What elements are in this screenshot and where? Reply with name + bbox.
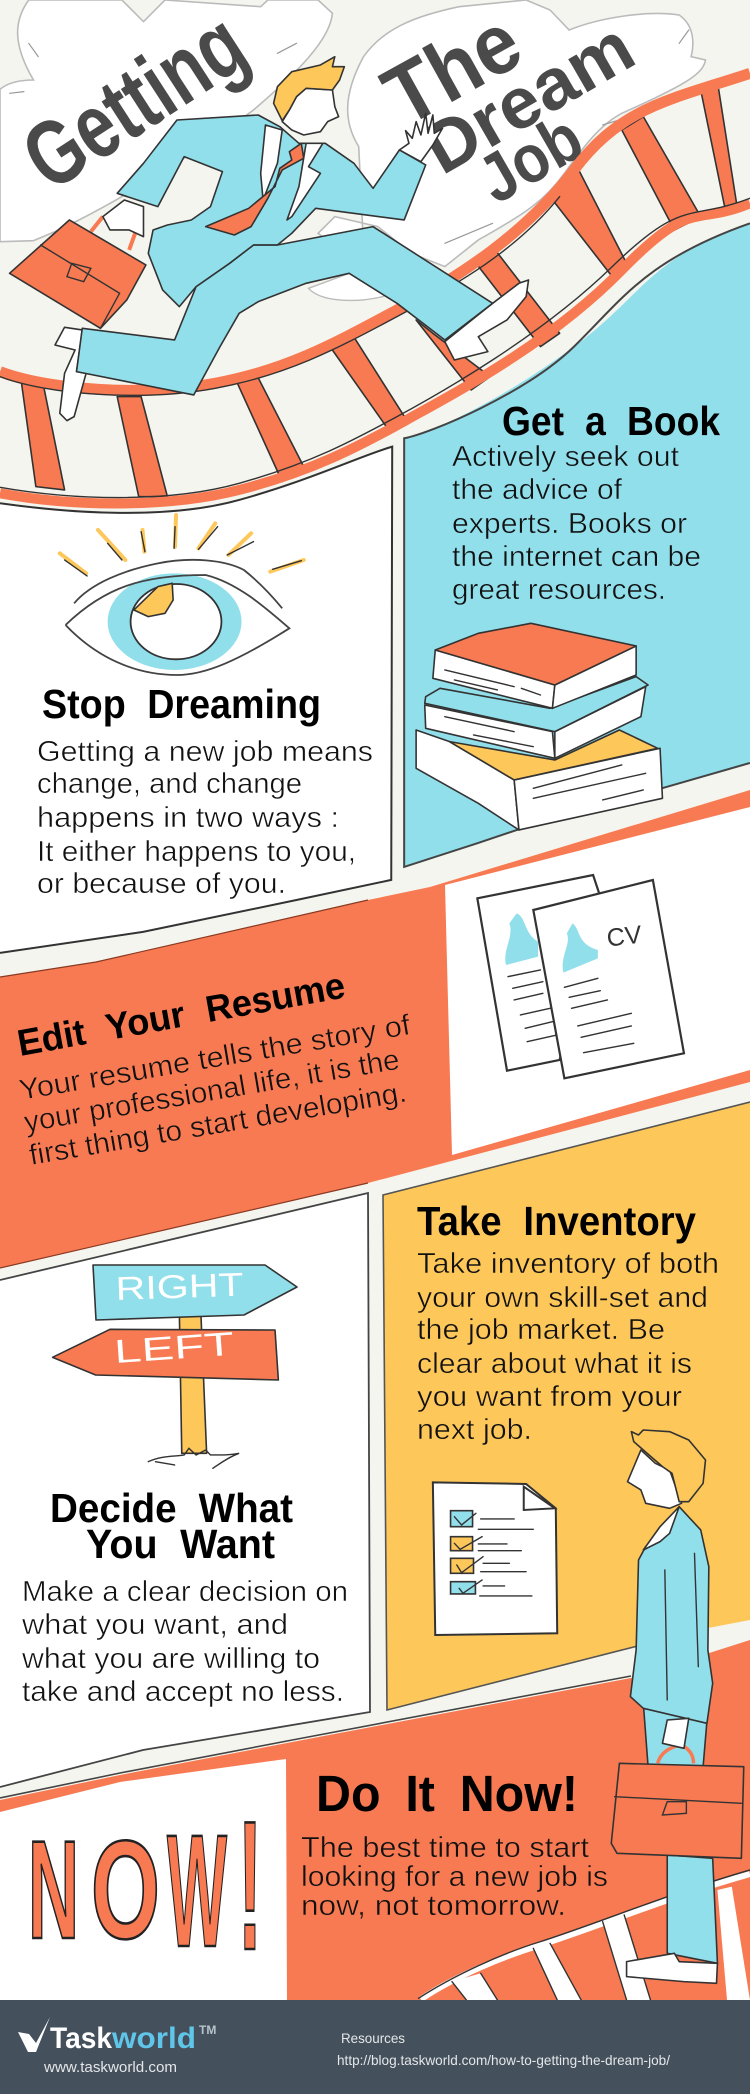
title (5, 0, 647, 218)
text: stop dreaming body: Getting a new job means (37, 736, 373, 768)
text: take inventory body: the job market. Be (417, 1314, 665, 1346)
briefcase (611, 1763, 744, 1858)
cv label: CV (606, 921, 643, 953)
lower legs (667, 1855, 717, 1963)
face (282, 88, 339, 135)
icon: eye (60, 515, 304, 675)
logo: taskworld: Task (50, 2022, 112, 2055)
trousers (77, 227, 493, 395)
hand (662, 1718, 689, 1748)
text: do it now body: now, not tomorrow. (301, 1890, 566, 1922)
text: edit your resume body: first thing to start developing. (27, 1077, 409, 1172)
title: Dream (410, 7, 647, 190)
website: www.taskworld.com (43, 2059, 177, 2076)
text: stop dreaming body: change, and change (37, 768, 302, 800)
shoes (627, 1953, 717, 1983)
panel: take inventory background (383, 1102, 750, 1710)
text: do it now body: looking for a new job is (301, 1861, 608, 1893)
back hand (103, 200, 143, 237)
logo: taskworld (18, 2017, 216, 2055)
text: do it now body (301, 1832, 608, 1922)
infographic canvas: ! (238, 1782, 262, 1988)
heading: edit your resume: Edit Your Resume (14, 965, 348, 1064)
resources label: Resources (341, 2030, 405, 2046)
logo: taskworld: world (111, 2022, 196, 2055)
text: take inventory body (417, 1248, 719, 1446)
text: get a book body: great resources. (452, 574, 666, 606)
text: get a book body: the advice of (452, 474, 623, 506)
text: decide what you want body: what you are willing to (21, 1643, 320, 1675)
hair (274, 57, 344, 121)
eye rays (60, 515, 304, 576)
right sign (93, 1265, 297, 1320)
icon: now lettering: N (28, 1811, 79, 1968)
text: take inventory body: Take inventory of both (417, 1248, 719, 1280)
text: get a book body (452, 441, 701, 606)
upper legs (643, 1703, 708, 1767)
panel: edit your resume background (0, 790, 750, 1268)
text: decide what you want body: Make a clear decision on (22, 1576, 348, 1608)
icon: now lettering: O (91, 1811, 160, 1968)
text: stop dreaming body: or because of you. (37, 868, 286, 900)
resources url: http://blog.taskworld.com/how-to-getting-the-dream-job/ (337, 2052, 670, 2068)
jacket (117, 115, 426, 307)
case handle (658, 1745, 694, 1763)
text: stop dreaming body: It either happens to you, (37, 836, 356, 868)
text: edit your resume body (17, 1009, 414, 1172)
left sign (53, 1329, 278, 1380)
panel: cv white area (445, 807, 750, 1155)
jacket (630, 1507, 713, 1723)
running man (10, 57, 529, 421)
text: get a book body: experts. Books or (452, 508, 687, 540)
back document (477, 875, 600, 1071)
text: decide what you want body: take and accept no less. (22, 1676, 344, 1708)
shirt (261, 125, 282, 200)
text: get a book body: Actively seek out (452, 441, 679, 473)
heading: decide what you want (50, 1485, 293, 1567)
logo: taskworld: TM (199, 2023, 216, 2037)
icon: stack of books (416, 623, 662, 830)
panel: now white area (0, 1759, 287, 2000)
back shoe (55, 327, 86, 421)
text: decide what you want body: what you want, and (21, 1609, 288, 1641)
icon: direction signpost (53, 1265, 297, 1468)
text: take inventory body: clear about what it is (417, 1348, 692, 1380)
bottom book (416, 730, 662, 830)
text: stop dreaming body: happens in two ways : (37, 802, 339, 834)
icon: cv documents (477, 875, 684, 1078)
middle book (425, 677, 648, 758)
icon: checklist (433, 1482, 557, 1635)
icon: now lettering (28, 1782, 262, 1988)
icon: now lettering: W (167, 1801, 227, 1980)
briefcase (10, 217, 146, 328)
text: edit your resume body: Your resume tells the story of (17, 1009, 414, 1107)
face (628, 1450, 682, 1508)
heading: decide what you want: You Want (86, 1521, 275, 1567)
heading: get a book: Get a Book (502, 398, 720, 444)
panel: stop dreaming background (0, 447, 392, 953)
front shoe (445, 280, 529, 360)
panel: get a book background (404, 223, 750, 867)
text: take inventory body: next job. (417, 1414, 532, 1446)
text: do it now body: The best time to start (301, 1832, 589, 1864)
text: get a book body: the internet can be (452, 541, 701, 573)
tie (206, 143, 304, 235)
heading: do it now: Do It Now! (316, 1765, 578, 1822)
icon: direction signpost: RIGHT (115, 1266, 244, 1307)
panel: do it now background (0, 1640, 750, 2000)
post (179, 1313, 207, 1453)
text: take inventory body: your own skill-set and (417, 1282, 708, 1314)
text: decide what you want body (21, 1576, 348, 1708)
ladder (0, 73, 750, 503)
title: Job (466, 99, 595, 218)
footer bar (0, 2000, 750, 2094)
panel: decide what you want background (0, 1193, 370, 1787)
grass (148, 1448, 239, 1468)
text: take inventory body: you want from your (417, 1381, 682, 1413)
heading: stop dreaming: Stop Dreaming (42, 681, 321, 727)
heading: decide what you want: Decide What (50, 1485, 293, 1531)
collar (643, 1507, 679, 1550)
header clouds (0, 0, 705, 300)
text: edit your resume body: your professional life, it is the (22, 1044, 402, 1139)
heading: take inventory: Take Inventory (417, 1198, 696, 1244)
front document (533, 880, 684, 1078)
standing man (611, 1430, 744, 1983)
hair (631, 1430, 705, 1502)
text: stop dreaming body (37, 736, 373, 900)
logo check mark (18, 2017, 50, 2052)
ladder foreground (419, 1870, 750, 2000)
raised hand (399, 113, 442, 162)
icon: direction signpost: LEFT (113, 1325, 235, 1370)
top book (433, 623, 636, 708)
